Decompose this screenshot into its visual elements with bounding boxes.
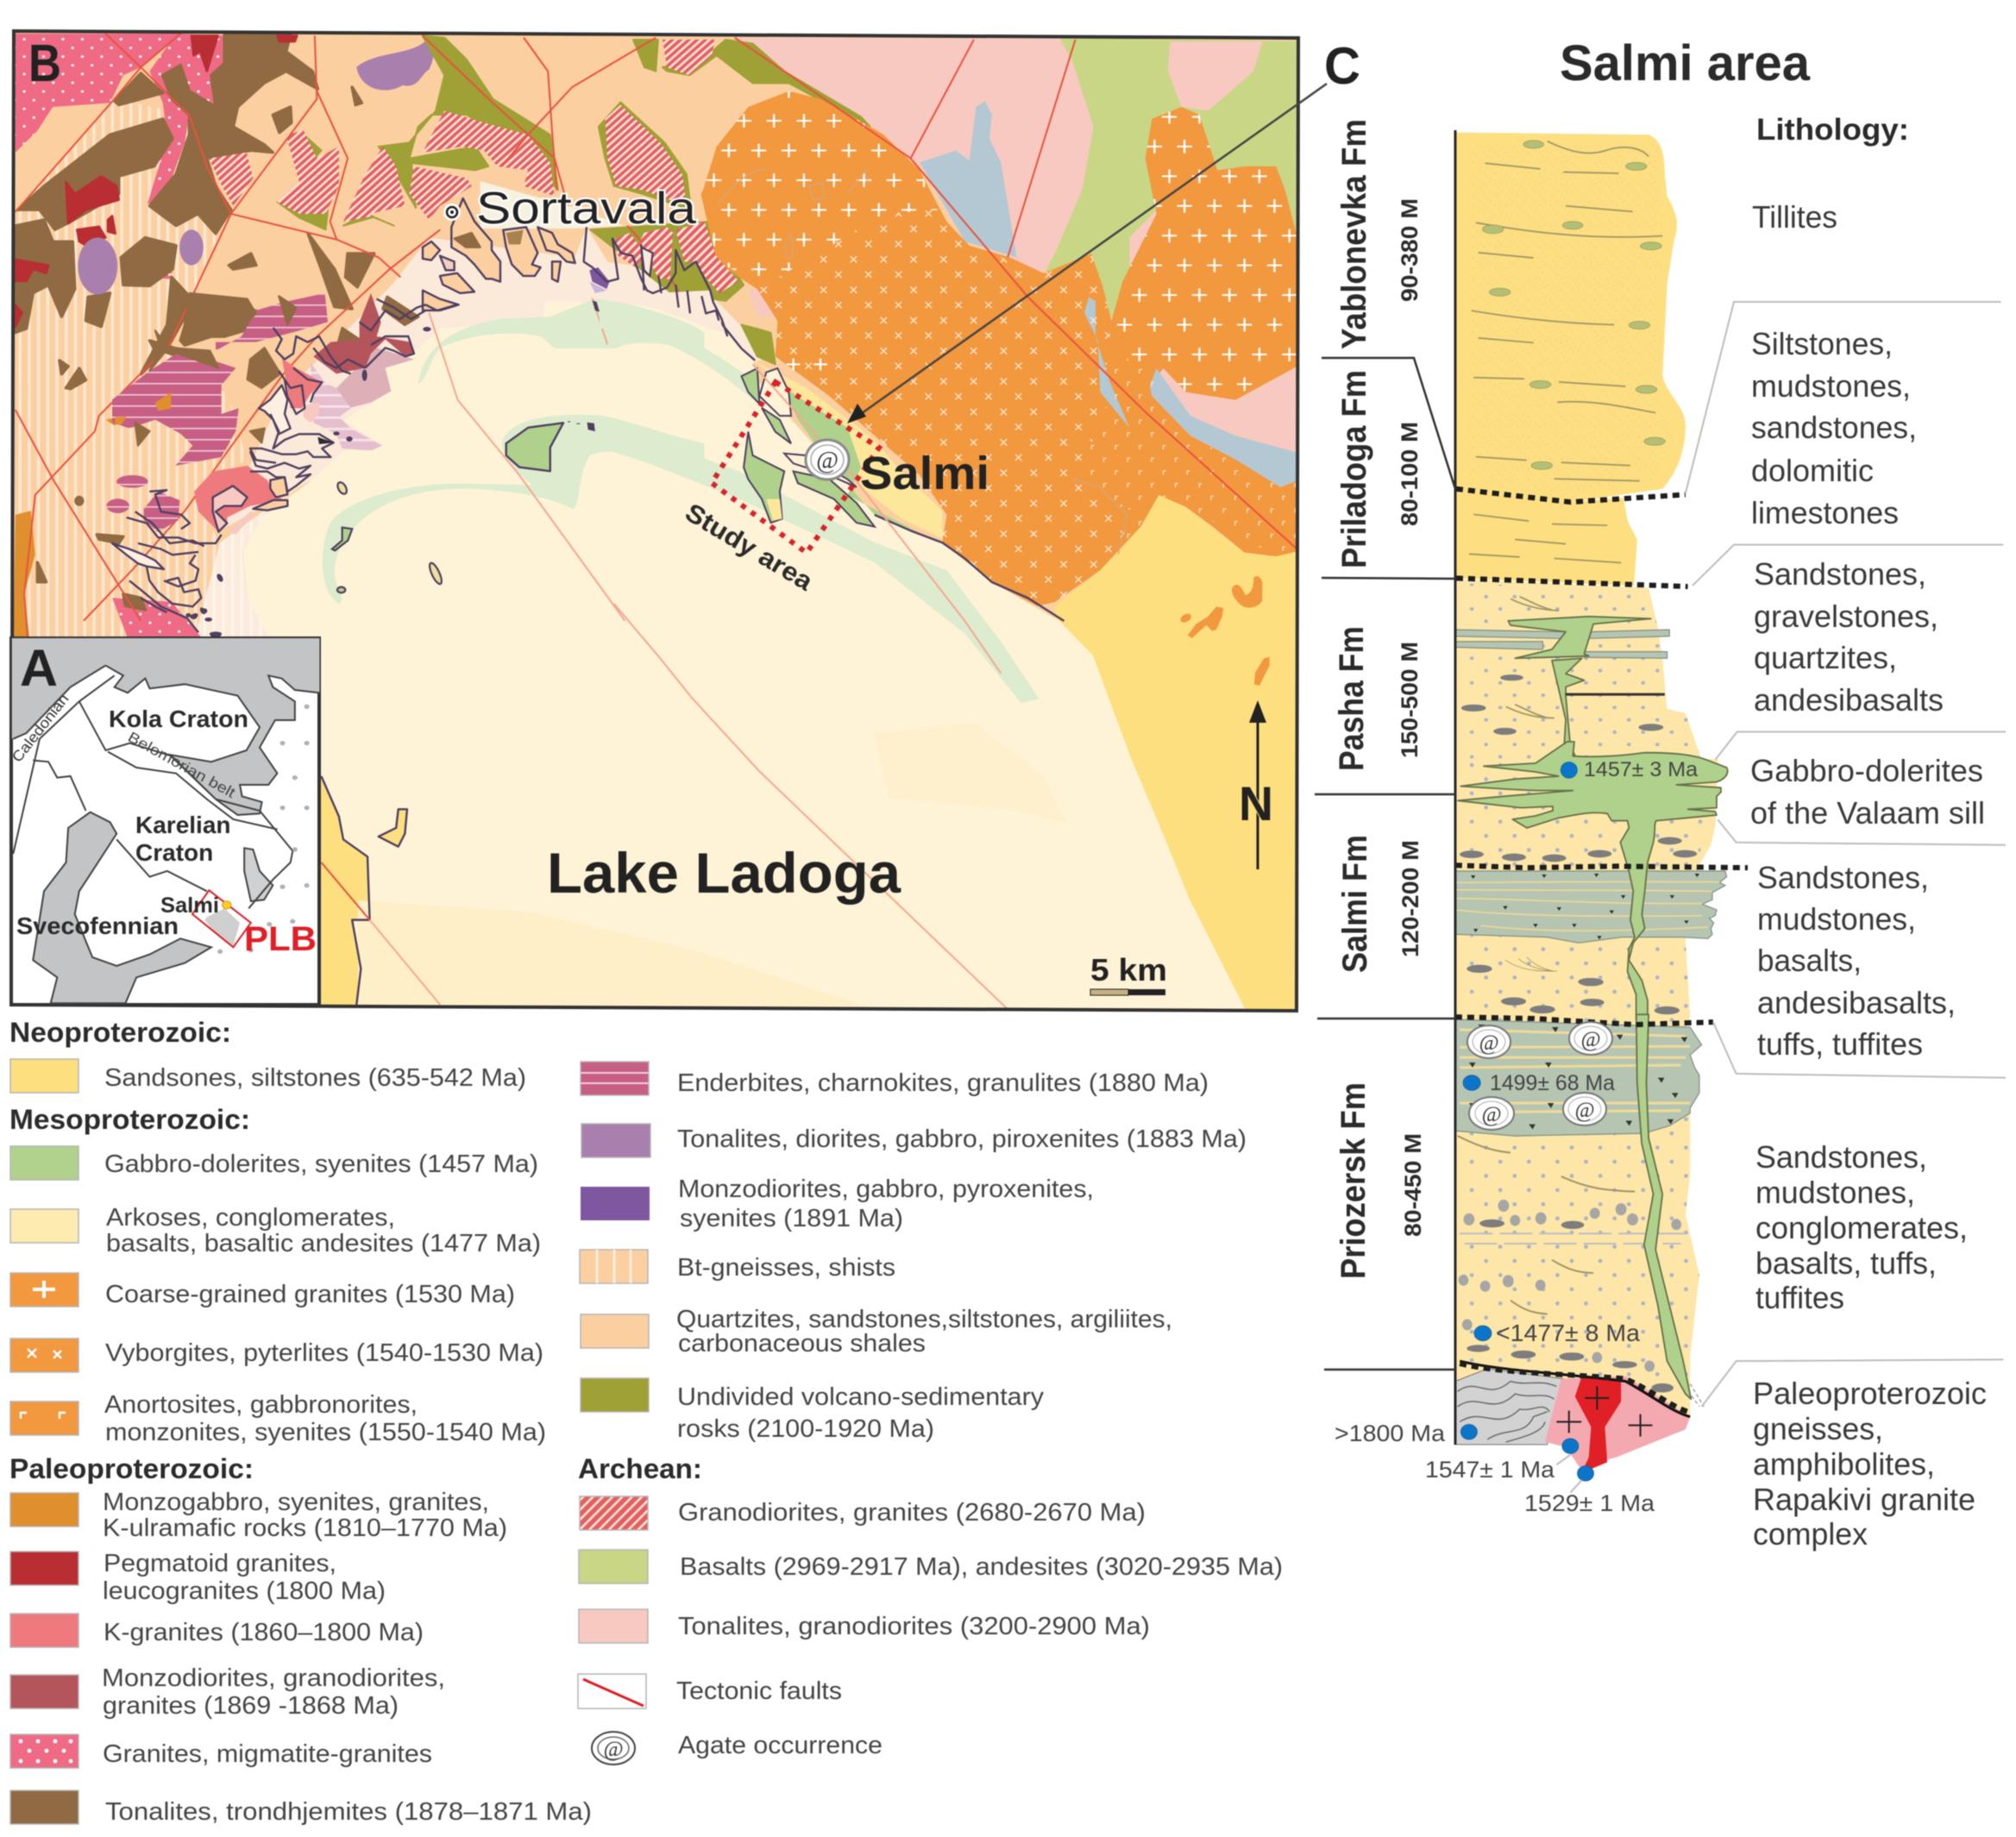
label: Svecofennian: Svecofennian [16, 912, 179, 939]
legend item: vyborgites [10, 1339, 543, 1372]
formation names: Yablonevka Fm [1335, 119, 1373, 349]
legend item: pegmatoid granites: Pegmatoid granites, [104, 1550, 336, 1577]
lithology text column [1750, 199, 1987, 1552]
legend heading: Mesoproterozoic: Mesoproterozoic: [9, 1104, 250, 1135]
legend item: Bt-gneisses: Bt-gneisses, shists [677, 1254, 895, 1282]
legend: left column [9, 1017, 592, 1826]
legend item: anorthosites: monzonites, syenites (1550-1540 Ma) [105, 1419, 546, 1446]
agate occurrence icons in column: @ [1482, 1103, 1501, 1126]
legend item: enderbites: Enderbites, charnokites, granulites (1880 Ma) [677, 1069, 1209, 1097]
lithology: Salmi sandstones: mudstones, [1757, 901, 1916, 937]
legend heading: Archean: Archean: [578, 1453, 702, 1484]
legend item: basalts: Basalts (2969-2917 Ma), andesites (3020-2935 Ma) [680, 1553, 1283, 1581]
map frame [11, 31, 1298, 1011]
lithology: basement [1753, 1376, 1987, 1552]
age labels: 1547± 1 Ma [1425, 1457, 1555, 1483]
panel B: geological map [9, 26, 1303, 1030]
legend item: agate occurrence [592, 1732, 882, 1765]
label: Belomorian belt: Belomorian belt [125, 729, 238, 801]
legend item: enderbites [581, 1062, 1209, 1097]
legend item: monzodiorites: granites (1869 -1868 Ma) [103, 1692, 399, 1720]
lithology: Priozersk sandstones: basalts, tuffs, [1755, 1245, 1937, 1281]
legend item: pegmatoid granites [10, 1550, 386, 1605]
map region: right side geology [590, 38, 1301, 1030]
legend item: arkoses [10, 1204, 541, 1257]
legend item: arkoses: basalts, basaltic andesites (1477 Ma) [106, 1230, 541, 1257]
icon: north arrow [1239, 700, 1273, 869]
lithology: siltstones group: Siltstones, [1751, 326, 1893, 361]
legend item: tonalites trondhjemites [10, 1790, 592, 1826]
basement: gneiss [1455, 1369, 1563, 1445]
unconformity lines lower [1455, 865, 1748, 1412]
legend item: arkoses: Arkoses, conglomerates, [106, 1204, 395, 1232]
formation thicknesses: 80-450 M [1400, 1133, 1426, 1237]
formation thicknesses: 80-100 M [1397, 422, 1423, 526]
lithology: sandstones group: gravelstones, [1754, 599, 1938, 634]
formation names [1333, 119, 1374, 1279]
legend item: monzodiorites purple: syenites (1891 Ma) [680, 1205, 903, 1232]
agate occurrence icons in column [1467, 1022, 1612, 1130]
basement: red granite [1575, 1376, 1621, 1477]
lithology: Salmi sandstones: tuffs, tuffites [1757, 1026, 1923, 1062]
legend item: gabbro-dolerites [10, 1146, 538, 1180]
map region: southwest archipelago and intrusions [106, 293, 457, 638]
map region: faults [16, 34, 687, 649]
legend item: migmatite granites [10, 1734, 432, 1768]
map region: Lake Ladoga water [242, 301, 1247, 1013]
label: Salmi: Salmi [860, 448, 989, 499]
formation names: Salmi Fm [1336, 835, 1374, 973]
legend item: coarse-grained granites: Coarse-grained granites (1530 Ma) [105, 1281, 515, 1308]
legend item: monzogabbro: Monzogabbro, syenites, granites, [103, 1489, 489, 1516]
legend item: monzogabbro: K-ulramafic rocks (1810–1770 Ma) [103, 1514, 507, 1542]
legend item: tonalites granodiorites [579, 1609, 1150, 1643]
lithology: Salmi sandstones: basalts, [1757, 943, 1862, 978]
legend item: volcano-sedimentary [581, 1378, 1045, 1443]
label: B: B [28, 34, 61, 92]
legend item: monzodiorites [10, 1665, 445, 1720]
age labels: <1477± 8 Ma [1496, 1320, 1640, 1346]
age labels: >1800 Ma [1335, 1420, 1446, 1446]
legend item: agate occurrence: @ [604, 1738, 623, 1761]
legend item: monzodiorites purple [581, 1176, 1094, 1232]
legend item: basalts [579, 1550, 1283, 1583]
lithology: basement: Paleoproterozoic [1753, 1376, 1987, 1411]
label: Salmi inset: Salmi [160, 893, 219, 918]
legend item: tonalites trondhjemites: Tonalites, trondhjemites (1878–1871 Ma) [105, 1798, 592, 1826]
label: C with arrow: C [1324, 37, 1360, 95]
legend item: quartzites: carbonaceous shales [678, 1330, 926, 1357]
title: Salmi area: Salmi area [1560, 35, 1811, 91]
legend item: agate occurrence: Agate occurrence [678, 1732, 882, 1759]
age labels: 1529± 1 Ma [1524, 1490, 1655, 1516]
formation names: Pasha Fm [1333, 626, 1371, 771]
label: Study area: Study area [680, 498, 818, 597]
lithology: sandstones group [1754, 556, 1944, 718]
map region: arkose yellow at lower left [321, 779, 368, 1006]
formation thicknesses: 120-200 M [1397, 840, 1423, 957]
lithology: sandstones group: quartzites, [1754, 640, 1897, 675]
label: Karelian Craton: Karelian [135, 812, 231, 838]
map region: pale green bands [323, 277, 704, 621]
formation names: Priozersk Fm [1335, 1082, 1372, 1279]
lithology: Priozersk sandstones [1755, 1139, 1968, 1315]
icon: Sortavala town marker [443, 204, 461, 221]
lithology: Priozersk sandstones: mudstones, [1755, 1175, 1915, 1210]
map region: lake fault continuation [690, 696, 1009, 1011]
legend item: quartzites: Quartzites, sandstones,siltstones, argiliites, [676, 1306, 1172, 1333]
lithology: Priozersk sandstones: Sandstones, [1755, 1139, 1927, 1175]
legend item: vyborgites: Vyborgites, pyterlites (1540-1530 Ma) [105, 1339, 543, 1367]
label: A: A [20, 639, 58, 697]
legend item: Bt-gneisses [580, 1250, 895, 1283]
heading: Lithology: Lithology: [1756, 113, 1909, 147]
lithology: Salmi sandstones: Sandstones, [1757, 860, 1929, 895]
legend item: volcano-sedimentary: rosks (2100-1920 Ma) [677, 1415, 934, 1443]
lithology: Priozersk sandstones: tuffites [1755, 1280, 1844, 1315]
legend item: volcano-sedimentary: Undivided volcano-sedimentary [677, 1383, 1045, 1411]
lithology: siltstones group: dolomitic [1751, 453, 1874, 488]
lithology: sandstones group: Sandstones, [1754, 556, 1926, 592]
map region: Sortavala coast islands [423, 181, 744, 336]
legend item: pegmatoid granites: leucogranites (1800 Ma) [103, 1577, 386, 1605]
legend item: tectonic faults [578, 1674, 842, 1708]
column: lower feeder dyke, markers and contacts [1455, 762, 2006, 1493]
legend item: granodiorites: Granodiorites, granites (2680-2670 Ma) [678, 1499, 1146, 1527]
lithology: sandstones group: andesibasalts [1754, 682, 1944, 718]
lithology: gabbro-dolerites: Gabbro-dolerites [1750, 753, 1983, 788]
legend item: sandstones [10, 1059, 526, 1093]
label: Karelian Craton: Craton [135, 839, 213, 866]
panel A: inset location map [9, 638, 319, 1005]
legend item: K-granites [10, 1614, 424, 1647]
legend heading: Paleoproterozoic: Paleoproterozoic: [9, 1453, 254, 1484]
lithology: siltstones group: limestones [1751, 495, 1899, 530]
lithology: siltstones group: sandstones, [1751, 410, 1917, 445]
map region: west coast of lake [190, 604, 690, 1005]
legend: right column [578, 1062, 1283, 1765]
formation thicknesses [1397, 198, 1426, 1237]
lithology: basement: complex [1753, 1516, 1868, 1552]
legend item: gabbro-dolerites: Gabbro-dolerites, syenites (1457 Ma) [104, 1150, 538, 1178]
legend item: granodiorites [580, 1496, 1146, 1530]
agate occurrence icons in column: @ [1580, 1028, 1601, 1051]
lithology: Priozersk sandstones: conglomerates, [1755, 1210, 1968, 1245]
age labels [1335, 758, 1699, 1516]
legend item: monzodiorites purple: Monzodiorites, gabbro, pyroxenites, [678, 1176, 1094, 1203]
lithology: Salmi sandstones: andesibasalts, [1757, 985, 1956, 1020]
legend item: tonalites diorites [581, 1124, 1247, 1157]
legend heading: Neoproterozoic: Neoproterozoic: [9, 1017, 231, 1048]
icon: agate at Salmi [806, 440, 849, 480]
lithology: basement: Rapakivi granite [1753, 1482, 1975, 1517]
legend item: sandstones: Sandsones, siltstones (635-542 Ma) [104, 1064, 526, 1092]
icon: agate at Salmi: @ [816, 448, 838, 474]
age markers [1460, 762, 1594, 1481]
label: Lake Ladoga: Lake Ladoga [547, 841, 901, 905]
legend item: anorthosites: Anortosites, gabbronorites, [104, 1391, 418, 1419]
lithology: gabbro-dolerites [1750, 753, 1985, 831]
column upper: tillites and Priladoga [1456, 133, 1704, 781]
map region: darker lake shoals [358, 900, 880, 1011]
map region: left side geology [13, 34, 770, 673]
formation names: Priladoga Fm [1335, 370, 1373, 568]
study area dashed box [712, 382, 879, 553]
label: Kola Craton: Kola Craton [109, 705, 248, 732]
legend item: K-granites: K-granites (1860–1800 Ma) [104, 1619, 424, 1646]
chart: stratigraphic column [1315, 130, 2006, 1516]
legend item: anorthosites [10, 1391, 546, 1446]
scale bar: 5 km [1090, 952, 1167, 987]
lithology: basement: amphibolites, [1753, 1446, 1935, 1482]
legend item: quartzites [581, 1306, 1172, 1357]
agate occurrence icons in column: @ [1575, 1099, 1594, 1122]
column axis [1454, 130, 1456, 1445]
legend item: monzodiorites: Monzodiorites, granodiorites, [102, 1665, 445, 1692]
legend item: migmatite granites: Granites, migmatite-granites [103, 1740, 432, 1768]
legend item: monzogabbro [10, 1489, 507, 1542]
formation thicknesses: 150-500 M [1397, 642, 1423, 758]
lithology: siltstones group [1751, 326, 1917, 530]
label: Caledonian: Caledonian [9, 691, 72, 765]
legend item: coarse-grained granites [10, 1273, 515, 1308]
column: Salmi tuff band, Valaam sill and feeder dyke [1455, 742, 1728, 1019]
age labels: 1457± 3 Ma [1584, 758, 1699, 781]
formation separators [1315, 358, 1455, 1370]
legend item: tonalites granodiorites: Tonalites, granodiorites (3200-2900 Ma) [678, 1613, 1150, 1640]
lithology: basement: gneisses, [1753, 1411, 1883, 1446]
icon: north arrow: N [1239, 776, 1273, 831]
lithology: Salmi sandstones [1757, 860, 1956, 1062]
salmi area geology [753, 361, 942, 539]
age labels: 1499± 68 Ma [1490, 1071, 1615, 1095]
formation thicknesses: 90-380 M [1397, 198, 1423, 302]
column lower: Pasha, Salmi, Priozersk and basement [1455, 759, 1718, 1477]
lithology: gabbro-dolerites: of the Valaam sill [1750, 795, 1985, 831]
legend item: tonalites diorites: Tonalites, diorites, gabbro, piroxenites (1883 Ma) [677, 1125, 1247, 1153]
map region: orange clasts in sandstone [1179, 576, 1270, 686]
label: PLB: PLB [244, 920, 317, 958]
archipelago outlines [112, 299, 457, 638]
label: C with arrow [847, 37, 1360, 423]
agate occurrence icons in column: @ [1479, 1031, 1499, 1055]
label: Sortavala: Sortavala [476, 184, 696, 234]
lithology: tillites: Tillites [1752, 199, 1837, 235]
lithology: siltstones group: mudstones, [1751, 368, 1911, 404]
basement: pink granite [1545, 1376, 1690, 1467]
legend item: tectonic faults: Tectonic faults [676, 1677, 842, 1705]
